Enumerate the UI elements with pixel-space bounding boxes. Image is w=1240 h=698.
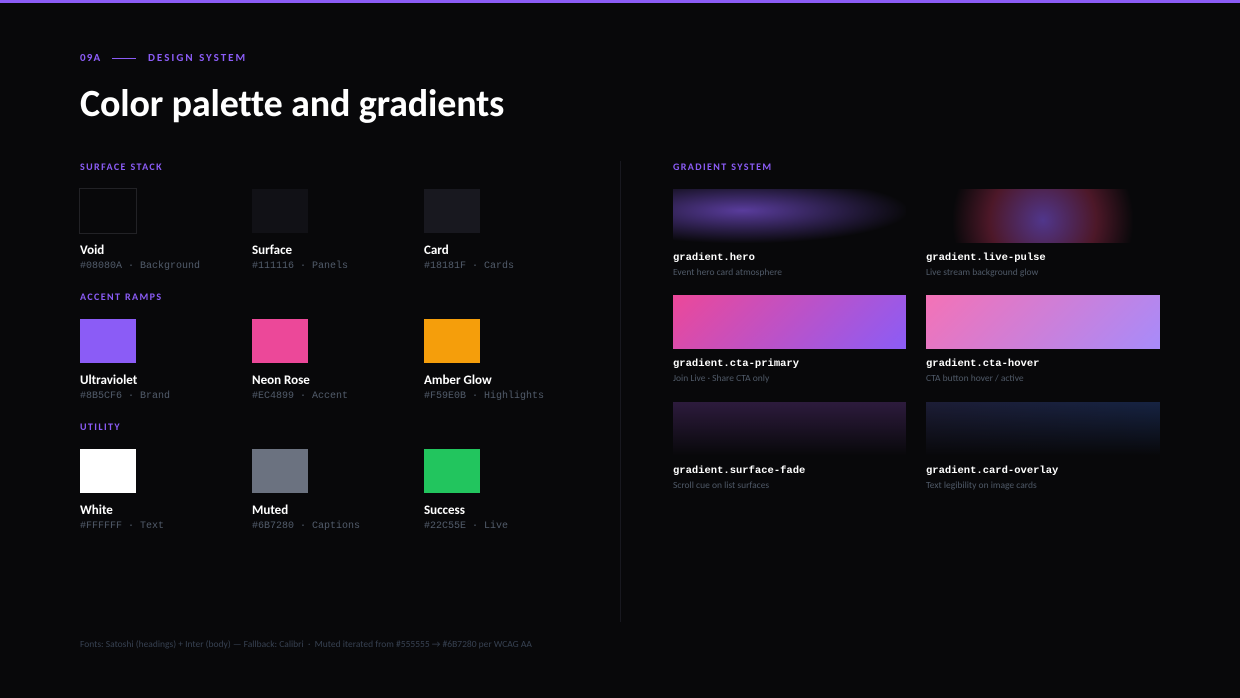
label: gradient.cta-primary: gradient.cta-primary <box>673 358 799 370</box>
section number: 09A <box>80 51 101 64</box>
swatch: success <box>424 449 480 493</box>
label: amber glow: Amber Glow <box>424 373 492 388</box>
label: muted: Muted <box>252 503 288 518</box>
label: gradient.card-overlay: gradient.card-overlay <box>926 465 1058 477</box>
footer note: Fonts: Satoshi (headings) + Inter (body) — Fallback: Calibri · Muted iterated from #555555 → #6B7280 per WCAG AA <box>80 638 532 650</box>
swatch: neon rose <box>252 319 308 363</box>
swatch: ultraviolet <box>80 319 136 363</box>
label: void: Void <box>80 243 104 258</box>
swatch: card <box>424 189 480 233</box>
code: white: #FFFFFF · Text <box>80 521 164 532</box>
caption: gradient.cta-hover: CTA button hover / active <box>926 372 1024 384</box>
code: surface: #111116 · Panels <box>252 261 348 272</box>
code: void: #08080A · Background <box>80 261 200 272</box>
panel: gradient system <box>673 160 1160 491</box>
label: gradient.hero: gradient.hero <box>673 252 755 264</box>
code: neon rose: #EC4899 · Accent <box>252 391 348 402</box>
label: card: Card <box>424 243 449 258</box>
code: success: #22C55E · Live <box>424 521 508 532</box>
swatch: gradient.live-pulse <box>926 189 1160 243</box>
top accent bar <box>0 0 1240 3</box>
caption: gradient.card-overlay: Text legibility on image cards <box>926 479 1037 491</box>
swatch: gradient.surface-fade <box>673 402 906 456</box>
label: neon rose: Neon Rose <box>252 373 310 388</box>
code: card: #18181F · Cards <box>424 261 514 272</box>
swatch: white <box>80 449 136 493</box>
swatch: amber glow <box>424 319 480 363</box>
eyebrow rule <box>112 58 136 59</box>
eyebrow label: DESIGN SYSTEM <box>148 51 247 64</box>
code: ultraviolet: #8B5CF6 · Brand <box>80 391 170 402</box>
swatch: surface <box>252 189 308 233</box>
panel: utility <box>80 420 508 532</box>
swatch: muted <box>252 449 308 493</box>
caption: gradient.surface-fade: Scroll cue on list surfaces <box>673 479 769 491</box>
swatch: void <box>80 189 136 233</box>
caption: gradient.live-pulse: Live stream background glow <box>926 266 1038 278</box>
code: amber glow: #F59E0B · Highlights <box>424 391 544 402</box>
swatch: gradient.card-overlay <box>926 402 1160 456</box>
swatch: gradient.cta-primary <box>673 295 906 349</box>
swatch: gradient.hero <box>673 189 906 243</box>
heading: surface stack: SURFACE STACK <box>80 160 163 173</box>
label: white: White <box>80 503 113 518</box>
panel: surface stack <box>79 160 514 272</box>
label: gradient.surface-fade: gradient.surface-fade <box>673 465 805 477</box>
label: gradient.cta-hover: gradient.cta-hover <box>926 358 1039 370</box>
caption: gradient.hero: Event hero card atmosphere <box>673 266 782 278</box>
label: success: Success <box>424 503 465 518</box>
title: Color palette and gradients <box>80 81 504 127</box>
swatch: gradient.cta-hover <box>926 295 1160 349</box>
code: muted: #6B7280 · Captions <box>252 521 360 532</box>
eyebrow <box>80 51 247 64</box>
panel: accent ramps <box>80 290 544 402</box>
heading: accent ramps: ACCENT RAMPS <box>80 290 162 303</box>
heading: utility: UTILITY <box>80 420 121 433</box>
caption: gradient.cta-primary: Join Live · Share CTA only <box>673 372 769 384</box>
heading: gradient system: GRADIENT SYSTEM <box>673 160 772 173</box>
label: ultraviolet: Ultraviolet <box>80 373 137 388</box>
label: surface: Surface <box>252 243 292 258</box>
label: gradient.live-pulse: gradient.live-pulse <box>926 252 1046 264</box>
